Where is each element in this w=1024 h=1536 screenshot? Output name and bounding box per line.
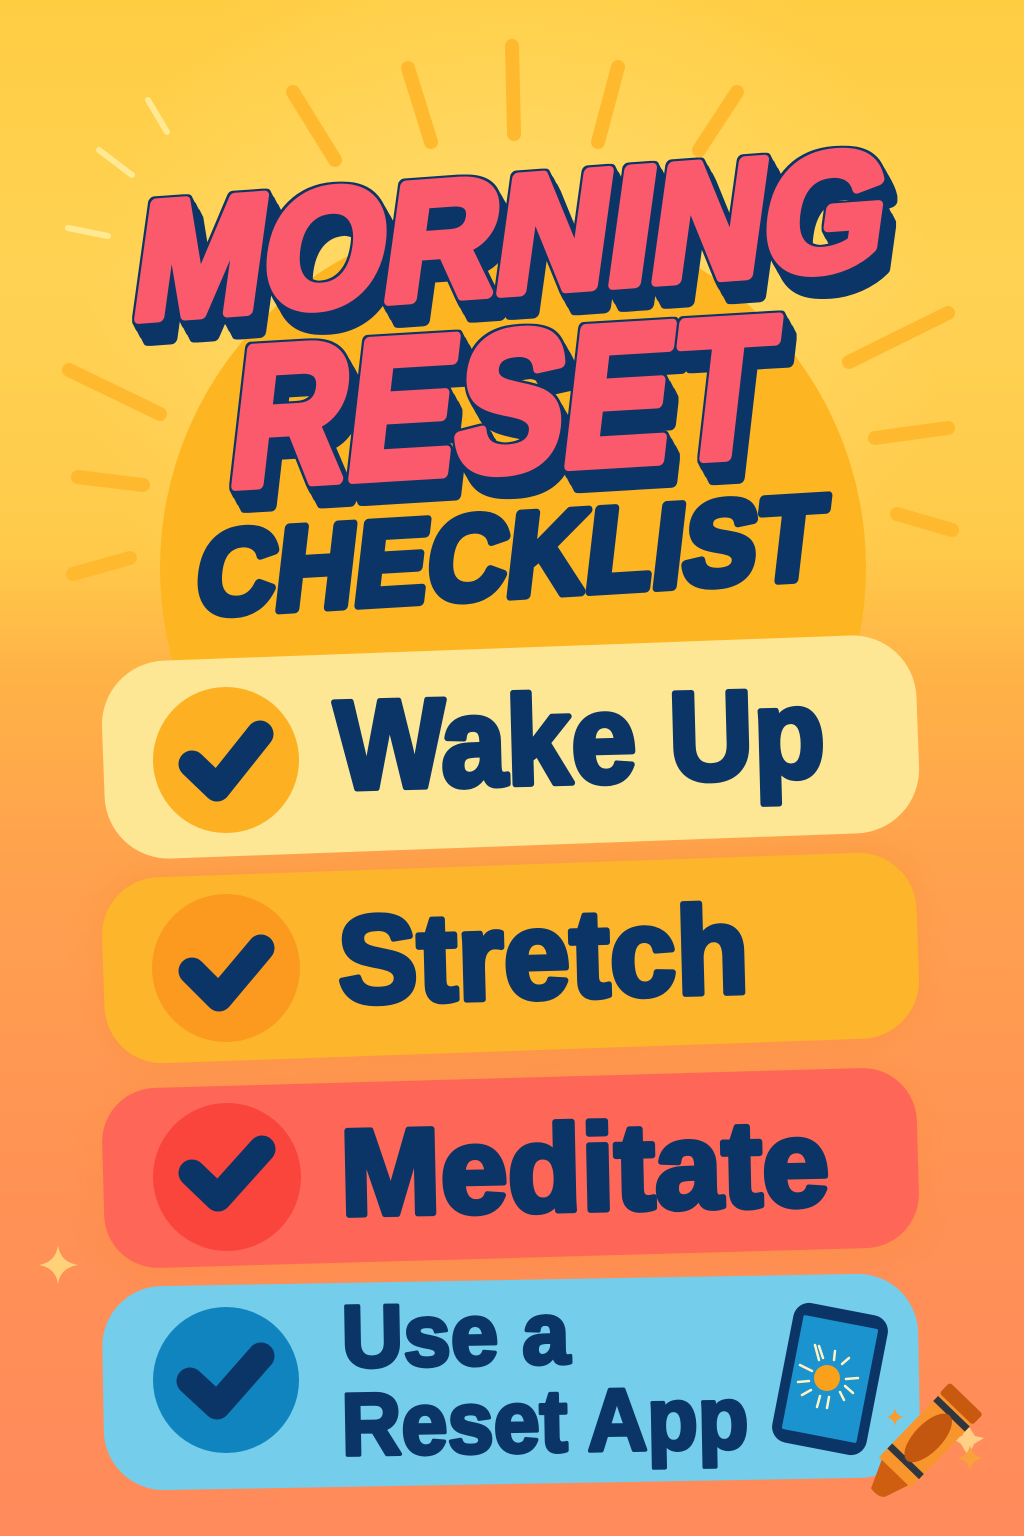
- title: Checklist: CHECKLIST: [190, 471, 832, 641]
- label: Use a: Use a: [341, 1283, 571, 1386]
- title: Reset: RESET: [220, 275, 786, 528]
- sparkles behind crayon: [952, 1425, 984, 1471]
- checkmark: [190, 1356, 261, 1406]
- card: Use a Reset App: [101, 1273, 921, 1491]
- sparkle: left: [39, 1245, 78, 1284]
- title: Morning: MORNING: [124, 116, 900, 355]
- soft card shadows: [101, 848, 919, 1273]
- pale sparkle rays: [68, 100, 167, 236]
- sun rays: [69, 46, 952, 574]
- check circle: [153, 687, 299, 833]
- label: Reset App: Reset App: [341, 1368, 749, 1474]
- label: Wake Up: Wake Up: [333, 662, 827, 816]
- label: Stretch: Stretch: [336, 881, 751, 1030]
- check circle: [153, 1103, 301, 1251]
- icon: tablet with sun: [769, 1300, 891, 1458]
- sun semicircle: [160, 220, 866, 660]
- checkmark: [192, 734, 260, 788]
- card: Meditate: [101, 1067, 920, 1269]
- check circle: [153, 1307, 299, 1453]
- check circle: [152, 894, 300, 1042]
- icon: crayon: [858, 1382, 983, 1509]
- card: Wake Up: [100, 633, 921, 861]
- sparkle: small orange: [886, 1408, 904, 1426]
- card: Stretch: [100, 851, 921, 1065]
- label: Meditate: Meditate: [339, 1095, 830, 1241]
- checkmark: [192, 948, 261, 998]
- checkmark: [192, 1149, 262, 1198]
